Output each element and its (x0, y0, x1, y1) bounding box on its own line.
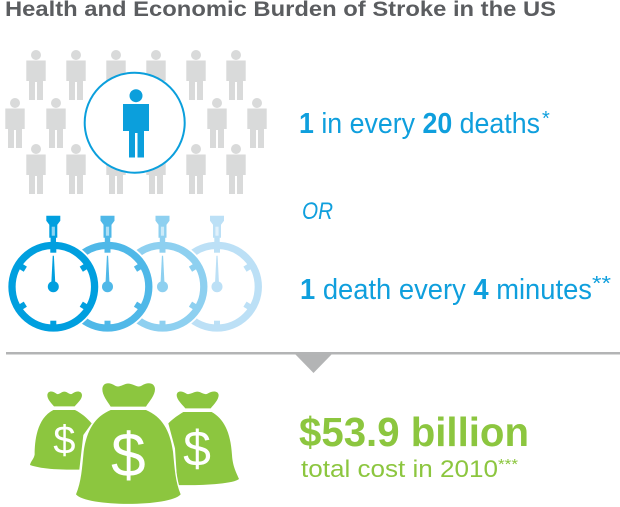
icon: four stopwatches (12, 216, 258, 331)
text: 1 death every 4 minutes: 1 death every 4 minutes (300, 274, 592, 306)
icon: highlighted person in circle (85, 73, 185, 173)
dollar sign center: $ (111, 422, 146, 491)
text: OR: OR (302, 198, 333, 225)
dollar sign right: $ (183, 420, 211, 476)
icon: crowd of people (5, 50, 267, 194)
footnote mark: single asterisk: * (542, 108, 550, 130)
text: $53.9 billion: $53.9 billion (299, 409, 529, 455)
footnote mark: double asterisk: ** (592, 273, 611, 295)
left bag (30, 392, 92, 470)
dollar sign left: $ (53, 418, 75, 462)
right bag (168, 392, 239, 485)
text: total cost in 2010: total cost in 2010 (301, 456, 498, 483)
divider with down arrow (6, 352, 620, 373)
center bag neck (102, 383, 155, 407)
icon: money bags (30, 383, 239, 504)
footnote mark: triple asterisk: *** (498, 456, 518, 473)
text: 1 in every 20 deaths: 1 in every 20 deaths (299, 108, 540, 140)
center bag (76, 410, 181, 504)
